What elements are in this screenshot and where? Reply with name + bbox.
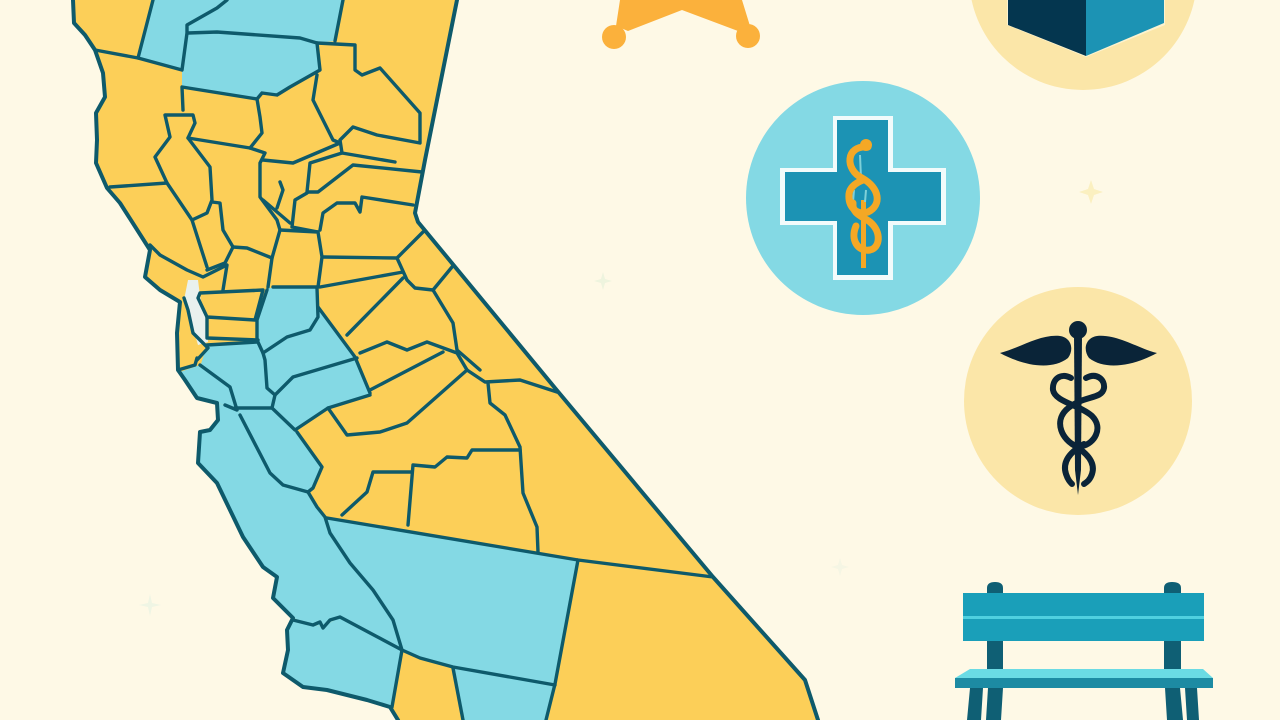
icon: cube in circle (969, 0, 1197, 90)
county boundary lines (95, 0, 713, 720)
state outline (73, 0, 818, 720)
background sparkles (139, 180, 1103, 616)
icon: park bench (955, 582, 1213, 720)
icon: sheriff star (602, 0, 760, 49)
icon: medical cross with serpent (746, 81, 980, 315)
blue counties (138, 0, 578, 720)
map: California counties (73, 0, 818, 720)
bench posts (967, 582, 1199, 720)
bench seat (955, 669, 1213, 688)
bench backrest (963, 593, 1204, 641)
bay water (184, 280, 208, 345)
icon: caduceus in circle (964, 287, 1192, 515)
map silhouette in yellow (73, 0, 818, 720)
